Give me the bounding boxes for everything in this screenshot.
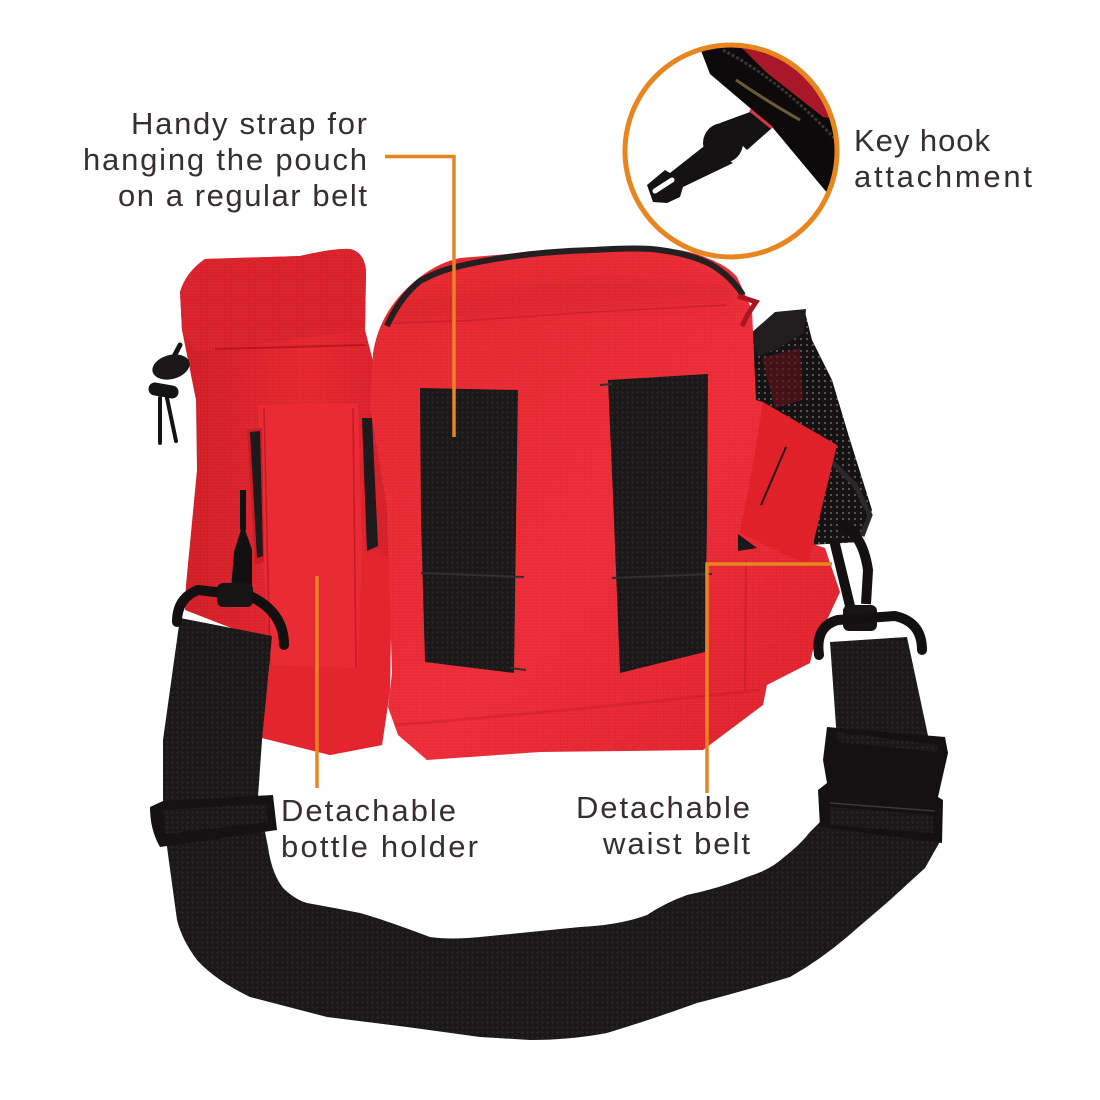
zipper: [387, 248, 743, 326]
zipper pull: [738, 296, 756, 326]
callout: orange leader line, waist belt: [707, 564, 832, 793]
callout: orange leader line, belt strap: [385, 156, 454, 437]
icon: left D-ring and swivel hook: [177, 490, 284, 645]
text block: bottle holder label: [281, 793, 478, 864]
callout: orange leader line, bottle holder: [315, 576, 319, 788]
panel: key hook inset circle: [625, 30, 850, 257]
text block: key hook label: Key hook: [854, 123, 990, 158]
bag corner in inset: [702, 48, 834, 192]
panel: right belt strip: [600, 374, 712, 673]
icon: strap adjuster: [150, 795, 277, 847]
strap tab: [720, 112, 772, 150]
icon: key hook: [647, 123, 743, 203]
holder lower body: [262, 548, 392, 755]
icon: drawstring toggle: [150, 345, 192, 443]
icon: side release buckle: [818, 727, 948, 843]
text block: key hook label: attachment: [854, 159, 1032, 194]
text block: belt strap label: hanging the pouch: [83, 142, 367, 177]
holder velcro slots: [247, 428, 264, 565]
text block: waist belt label: waist belt: [602, 826, 750, 861]
panel: shoulder strap: [163, 618, 942, 1040]
icon: mesh side pocket: [745, 309, 872, 545]
text block: waist belt label: Detachable: [576, 790, 750, 825]
text block: belt strap label: Handy strap for: [131, 106, 367, 141]
text block: belt strap label: on a regular belt: [118, 178, 367, 213]
panel: left belt strip: [420, 388, 526, 673]
panel: side tab: [740, 402, 837, 565]
panel: main pouch body: [370, 247, 840, 760]
text block: waist belt label: [576, 790, 750, 861]
holder front flap: [258, 404, 362, 672]
infographic: pouch features: [85, 42, 1032, 1040]
icon: right swivel hook and D-ring: [818, 525, 922, 655]
text block: key hook label: [854, 123, 1032, 194]
panel: bottle holder pouch: [150, 249, 392, 755]
text block: bottle holder label: bottle holder: [281, 829, 478, 864]
text block: belt strap label: [83, 106, 367, 213]
text block: bottle holder label: Detachable: [281, 793, 456, 828]
soft shading: [393, 275, 740, 322]
